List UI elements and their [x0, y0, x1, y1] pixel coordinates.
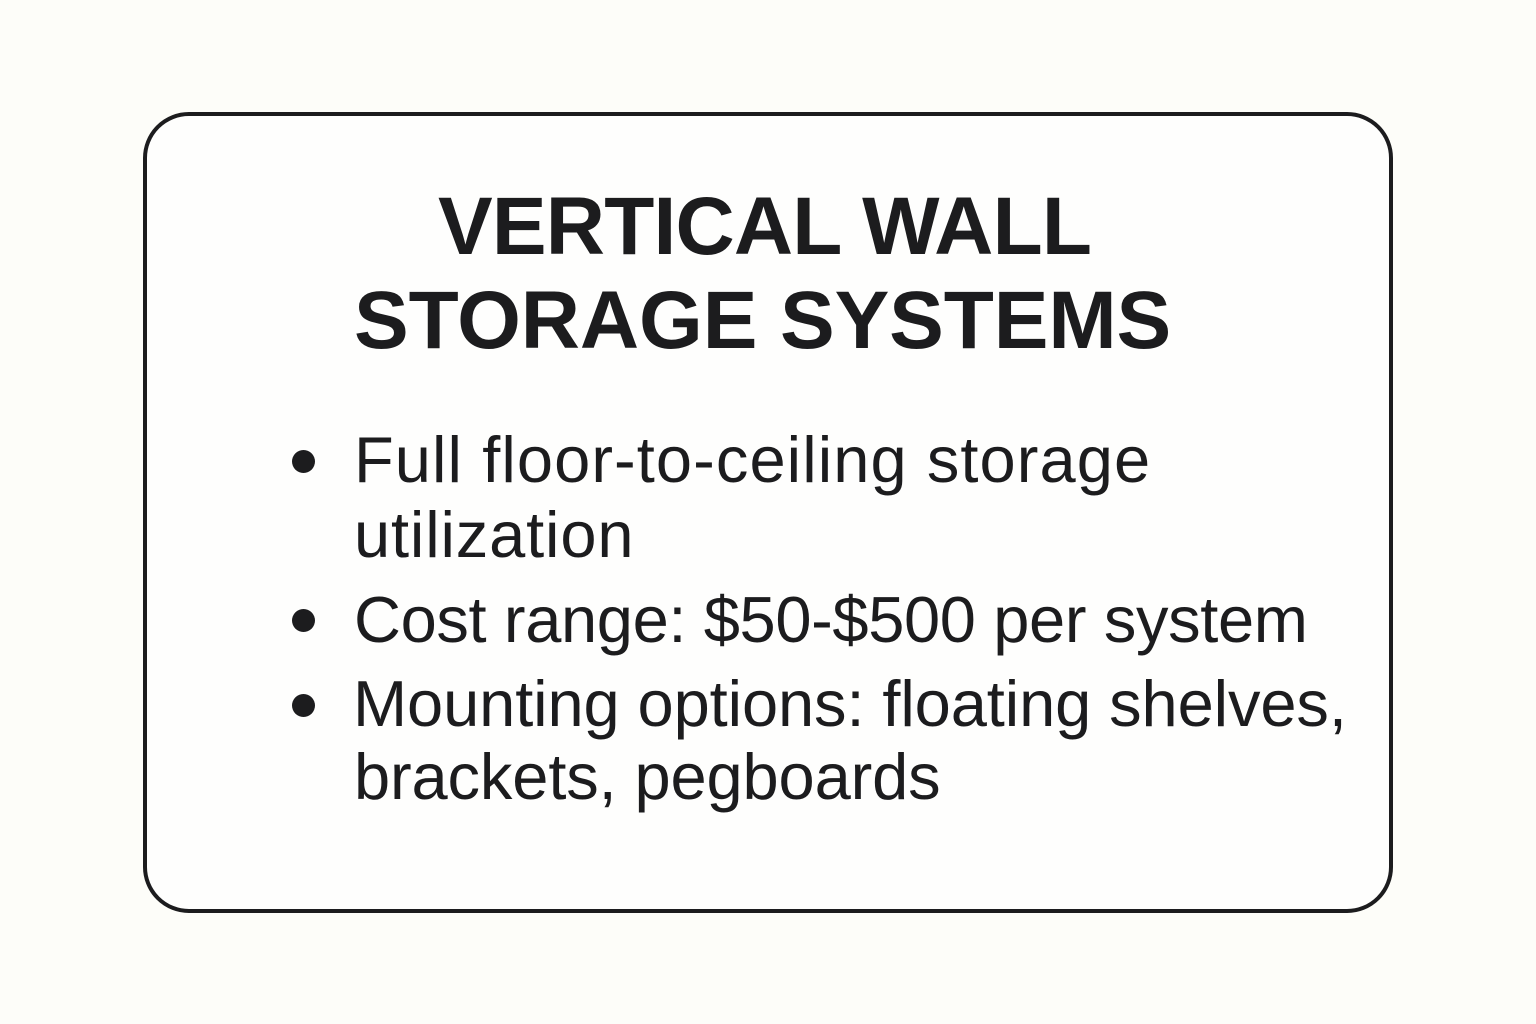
bullet 1: [292, 423, 1151, 571]
bullet dot 2: [292, 609, 315, 632]
bullet 3: [292, 667, 1347, 813]
bullet 2 text: Cost range: $50-$500 per system: [354, 583, 1308, 656]
title: [354, 181, 1171, 366]
panel: card: [143, 112, 1393, 913]
bullet 2: [292, 583, 1308, 656]
bullet 3 text line 2: brackets, pegboards: [354, 740, 940, 813]
bullet 1 text line 1: Full floor-to-ceiling storage: [354, 423, 1151, 496]
bullet dot 3: [292, 694, 315, 717]
bullet 3 text line 1: Mounting options: floating shelves,: [353, 667, 1347, 740]
title line 2: STORAGE SYSTEMS: [354, 275, 1171, 366]
title line 1: VERTICAL WALL: [438, 181, 1091, 272]
bullet 1 text line 2: utilization: [354, 498, 634, 571]
bullet dot 1: [292, 450, 315, 473]
